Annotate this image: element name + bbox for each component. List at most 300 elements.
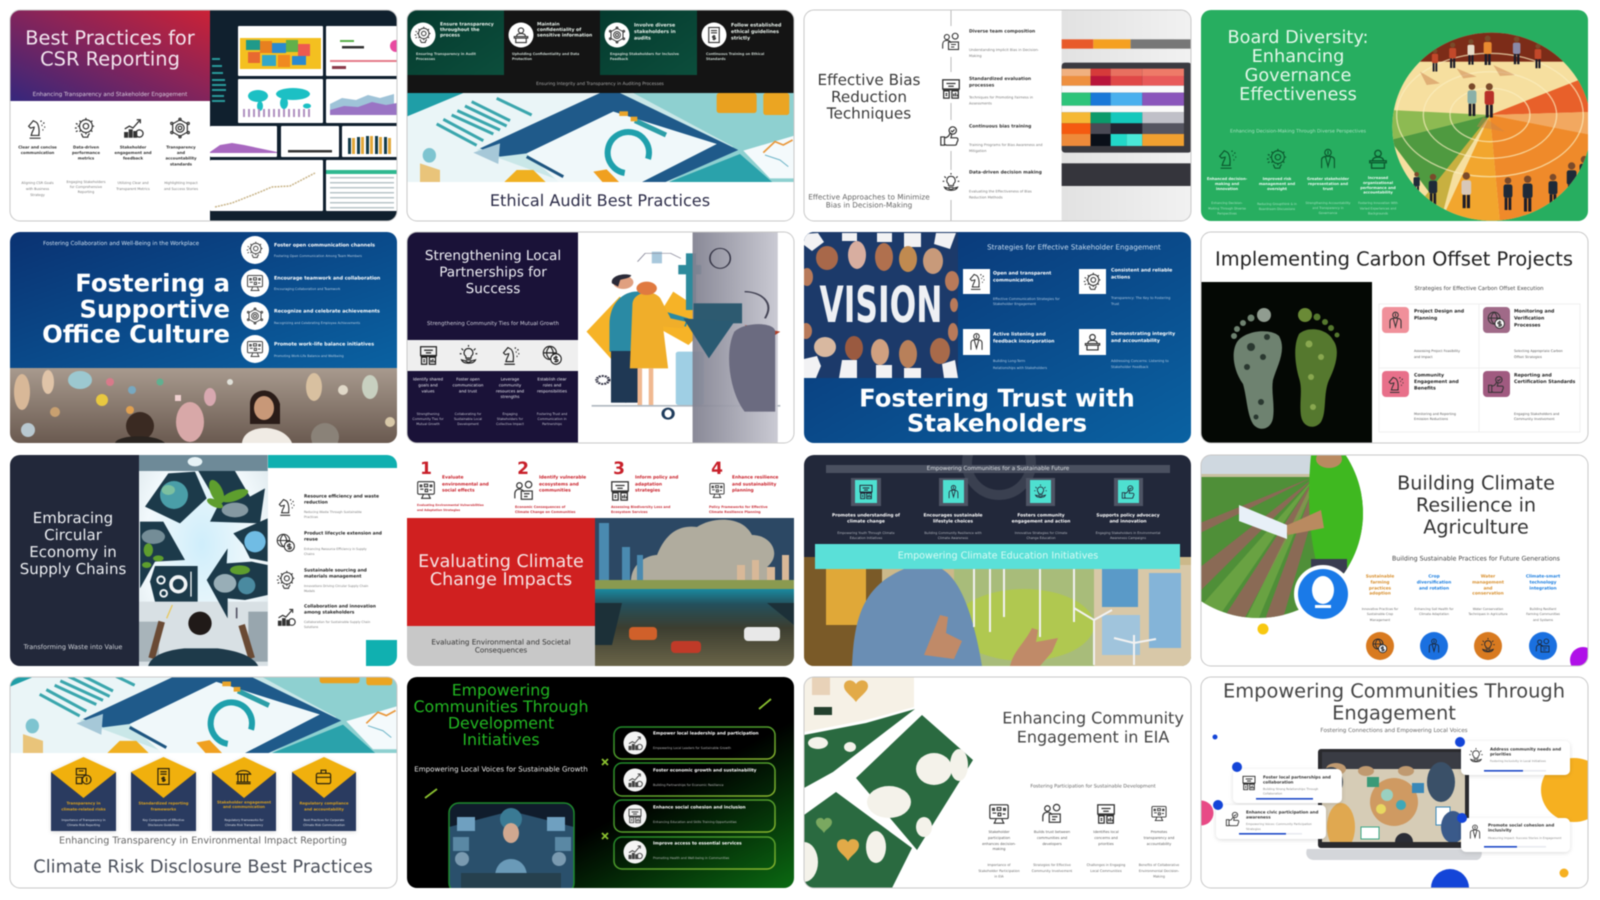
initiative captions: Education Initiatives <box>850 536 883 540</box>
strategy captions: Building Long-Term <box>993 359 1026 363</box>
practice tiles: Follow established <box>731 22 782 28</box>
benefit labels: accountability <box>1147 842 1171 846</box>
title: Governance <box>1245 66 1351 86</box>
step headings: Identify vulnerable <box>539 474 586 480</box>
labels: roles and <box>543 382 562 388</box>
vision photo <box>800 232 959 378</box>
feature captions: Transparent Metrics <box>115 187 150 191</box>
labels <box>413 376 567 399</box>
practice captions: Climate Adaptation <box>1419 612 1449 616</box>
border <box>407 232 794 443</box>
initiative captions: Empowering Youth Through Climate <box>837 531 895 535</box>
benefit captions: Backgrounds <box>1368 212 1388 216</box>
title: Development <box>448 714 554 732</box>
strategy headings: and accountability <box>1111 338 1160 344</box>
panel: Fostering a Supportive Office Culture <box>10 232 397 451</box>
practice tiles: confidentiality of <box>537 27 582 33</box>
title: Enhancing Community <box>1002 708 1184 728</box>
icons <box>277 500 295 625</box>
practice tiles: stakeholders in <box>634 29 676 35</box>
circular economy image <box>135 455 268 668</box>
step headings <box>442 474 778 494</box>
card captions: Best Practices for Corporate <box>304 818 345 822</box>
strategy headings: Verification <box>1514 316 1544 322</box>
callout headings: priorities <box>1490 752 1512 756</box>
initiative cards <box>614 727 775 869</box>
initiative captions <box>837 531 1161 540</box>
practice list: Encourage teamwork and collaboration <box>274 276 381 282</box>
title: Economy in <box>29 543 117 561</box>
callout headings: Address community needs and <box>1490 746 1561 752</box>
strategy headings <box>1414 308 1576 392</box>
panel: Implementing Carbon Offset Projects <box>1201 232 1588 443</box>
callout headings: Promote social cohesion and <box>1488 822 1554 828</box>
feature labels: communication <box>21 150 54 155</box>
title: Effectiveness <box>1239 85 1357 105</box>
futuristic meeting image <box>449 803 574 893</box>
practice tiles: Involve diverse <box>634 22 676 28</box>
technique captions: Understanding Implicit Bias in Decision- <box>969 48 1040 52</box>
practice list: Foster open communication channels <box>274 242 375 248</box>
step icons <box>418 481 724 500</box>
step headings: and sustainability <box>732 482 777 488</box>
practice headings: conservation <box>1472 590 1504 596</box>
title: Initiatives <box>462 730 540 749</box>
subtitle: Fostering Participation for Sustainable Development <box>1030 784 1156 790</box>
benefit captions: Strengthening Accountability <box>1306 201 1351 205</box>
list captions: Innovations Driving Circular Supply Chain <box>304 584 368 588</box>
title banner <box>815 544 1180 569</box>
title: Climate Risk Disclosure Best Practices <box>33 856 373 878</box>
icon tiles <box>1382 307 1510 397</box>
step numbers: 2 <box>517 459 529 479</box>
benefit labels: Increased <box>1368 176 1389 180</box>
laptop with photo <box>1306 749 1482 860</box>
card captions: Climate Risk Transparency <box>225 823 263 827</box>
feature labels: Data-driven <box>73 144 99 150</box>
strategy captions: Offset Strategies <box>1514 355 1542 359</box>
practice tiles: Ensure transparency <box>440 22 494 28</box>
icons <box>1220 149 1386 168</box>
strategy captions: Community Involvement <box>1514 417 1555 421</box>
practice tiles: ethical guidelines <box>731 29 779 35</box>
feature labels: Clear and concise <box>18 144 57 150</box>
practice list: Promoting Work-Life Balance and Wellbeing <box>274 354 344 358</box>
practice headings: and rotation <box>1419 586 1449 592</box>
benefit labels: enhances decision- <box>982 842 1017 846</box>
subtitle: Enhancing Transparency in Environmental Impact Reporting <box>59 836 347 846</box>
title <box>859 384 1135 438</box>
border <box>407 10 794 221</box>
practice headings: diversification <box>1417 580 1451 586</box>
initiative headings: and innovation <box>1109 518 1147 524</box>
benefit labels: accountability <box>1363 190 1393 194</box>
initiative headings: Fosters community <box>1017 512 1065 518</box>
step captions: Ecosystem Services <box>611 510 648 514</box>
practice tiles: strictly <box>731 36 751 42</box>
list headings: Resource efficiency and waste <box>304 494 379 500</box>
practice captions: Management <box>1370 618 1391 622</box>
title <box>1228 28 1368 105</box>
technique captions: Reduction Methods <box>969 196 1003 200</box>
title: Empowering Communities Through <box>1223 680 1565 702</box>
classroom photo <box>804 557 1191 666</box>
strategy captions: Engaging Stakeholders and <box>1514 412 1559 416</box>
initiative cards: Foster economic growth and sustainability <box>653 768 757 774</box>
icons column <box>941 33 959 190</box>
title <box>1002 708 1184 746</box>
decorative circles <box>1188 734 1600 900</box>
captions: Engaging <box>503 412 517 416</box>
labels: Foster open <box>456 376 480 382</box>
border <box>10 10 397 221</box>
step headings: adaptation <box>635 482 662 488</box>
strategy captions: Transparency: The Key to Fostering <box>1110 296 1170 300</box>
practice tiles <box>407 10 794 93</box>
list headings: Product lifecycle extension and <box>304 530 382 536</box>
panel: Effective Bias Reduction Techniques <box>804 9 1195 223</box>
strategy captions: Effective Communication Strategies for <box>993 297 1060 301</box>
panel: Strengthening Local Partnerships for Success <box>407 225 794 445</box>
strategy headings: Planning <box>1414 316 1437 322</box>
callout icons <box>1226 748 1483 839</box>
initiative cards: Enhance social cohesion and inclusion <box>653 804 746 810</box>
title <box>42 272 230 344</box>
practice list <box>241 236 381 363</box>
strategy headings: Engagement and <box>1414 379 1459 385</box>
subtitle: Strengthening Community Ties for Mutual Growth <box>427 320 559 327</box>
initiative captions: Climate Awareness <box>938 536 969 540</box>
title: Agriculture <box>1423 516 1529 538</box>
practice captions: Water Conservation <box>1473 607 1503 611</box>
initiative captions: Awareness Campaigns <box>1110 536 1146 540</box>
title <box>414 680 588 749</box>
technique headings: processes <box>969 84 995 88</box>
practice tiles: Processes <box>416 57 435 61</box>
red title block: Change Impacts <box>430 570 572 590</box>
subtitle: Effective Approaches to Minimize <box>808 192 930 202</box>
labels: communication <box>453 382 484 388</box>
benefit labels: making <box>992 847 1006 851</box>
practice icons <box>1366 632 1557 660</box>
card headings: Regulatory compliance <box>299 800 349 806</box>
map mosaic image <box>790 677 973 888</box>
title <box>818 71 921 122</box>
title: Resilience in <box>1416 494 1536 516</box>
benefit labels: organizational <box>1363 181 1393 185</box>
list captions <box>304 510 370 629</box>
initiative captions: Change Education <box>1026 536 1056 540</box>
dashboard image <box>210 10 402 221</box>
strategy captions <box>993 296 1170 370</box>
panel: Best Practices for CSR Reporting <box>10 10 402 221</box>
strategy captions <box>1414 349 1563 421</box>
practice list: Encouraging Collaboration and Teamwork <box>274 287 341 291</box>
labels: Identify shared <box>413 376 443 382</box>
practice tiles: throughout the <box>440 27 480 33</box>
initiative captions: Innovative Strategies for Climate <box>1015 531 1067 535</box>
benefit labels: concerns and <box>1094 836 1118 840</box>
title banner: Enhancing Transparency and Stakeholder Engagement <box>33 91 188 98</box>
title: Enhancing <box>1252 47 1344 67</box>
technique headings: Continuous bias training <box>969 124 1031 130</box>
icons <box>990 804 1166 823</box>
list headings: Sustainable sourcing and <box>304 568 367 574</box>
practice captions: Farming Communities <box>1526 612 1560 616</box>
title: Techniques <box>826 104 911 122</box>
callout captions <box>1246 759 1562 840</box>
benefit labels: Promotes <box>1151 830 1167 834</box>
technique captions: Mitigation <box>969 149 986 153</box>
practice tiles: Ensuring Integrity and Transparency in Auditing Processes <box>536 81 665 87</box>
strategy headings: Demonstrating integrity <box>1111 331 1175 337</box>
step captions: Climate Resilience Planning <box>709 510 761 514</box>
strategy captions: Emission Reductions <box>1414 417 1448 421</box>
technique headings: Data-driven decision making <box>969 170 1042 176</box>
card captions: Importance of Transparency in <box>61 818 106 822</box>
strategy headings: Open and transparent <box>993 270 1052 276</box>
card captions: Climate Risk Communication <box>303 823 345 827</box>
captions: Development <box>457 422 479 426</box>
strategy captions: Monitoring and Reporting <box>1414 412 1456 416</box>
icon tiles <box>851 478 1143 506</box>
feature captions: and Success Stories <box>164 187 198 191</box>
benefit captions: Making <box>1153 874 1165 878</box>
card captions <box>61 818 345 827</box>
list captions: Practices <box>304 515 318 519</box>
border <box>10 677 397 888</box>
title: Engagement in EIA <box>1017 728 1169 746</box>
callout captions: Building Strong Relationships Through <box>1263 787 1318 791</box>
initiative cards: Promoting Health and Well-being in Communities <box>653 856 730 860</box>
initiative headings: climate change <box>847 518 885 524</box>
technique headings: Diverse team composition <box>969 28 1035 34</box>
icon tiles <box>963 269 1106 355</box>
panel: Board Diversity <box>1201 10 1600 223</box>
benefit captions: Perspectives <box>1217 212 1237 216</box>
panel: Empowering Communities Through Development Initiatives <box>407 677 794 893</box>
benefit labels: trust <box>1323 187 1333 191</box>
subtitle <box>808 192 930 210</box>
title: Success <box>466 281 520 297</box>
initiative captions: Building Community Resilience with <box>924 531 982 535</box>
captions: Partnerships <box>542 422 562 426</box>
callout progress bars <box>1239 770 1546 848</box>
labels: and trust <box>459 388 478 394</box>
feature labels: Stakeholder <box>120 144 146 150</box>
captions: Collective Impact <box>496 422 525 426</box>
feature captions: with Business <box>26 187 49 191</box>
title: Empowering <box>452 680 550 700</box>
benefit captions: and Transparency in <box>1312 206 1344 210</box>
border <box>1201 232 1588 443</box>
strategy captions: Relationships with Stakeholders <box>993 366 1047 370</box>
subtitle: Building Sustainable Practices for Future Generations <box>1392 556 1560 562</box>
panel: Evaluating Climate Change Impacts <box>407 455 794 666</box>
benefit captions: Making Through Diverse <box>1208 206 1246 210</box>
practice tiles: Upholding Confidentiality and Data <box>512 52 580 56</box>
list captions: Solutions <box>304 625 319 629</box>
practice cards <box>51 757 356 831</box>
title: Circular <box>44 526 103 544</box>
title: Ethical Audit Best Practices <box>490 191 710 210</box>
vision photo: VISION <box>820 276 942 334</box>
callout cards <box>1216 741 1570 852</box>
panel: Enhancing Community Engagement in EIA <box>790 677 1191 888</box>
practice tiles: sensitive information <box>537 32 592 38</box>
benefit captions: Reducing Groupthink & in <box>1257 202 1297 206</box>
panel: Empowering Communities Through Engagement <box>1188 677 1600 900</box>
red title block: Evaluating Climate <box>418 552 584 572</box>
strategy captions: and Impact <box>1414 355 1433 359</box>
technique headings <box>969 28 1042 176</box>
strategy headings <box>993 268 1175 344</box>
practice headings: integration <box>1529 586 1557 592</box>
feature labels <box>18 144 197 166</box>
callout markers <box>1213 737 1467 823</box>
step headings: communities <box>539 488 571 494</box>
step captions: and Adaptation Strategies <box>417 508 460 512</box>
step numbers: 1 <box>420 459 432 479</box>
practice list: Recognize and celebrate achievements <box>274 308 380 314</box>
step numbers: 4 <box>711 459 723 479</box>
benefit captions: Environmental Decision- <box>1139 869 1180 873</box>
strategy captions: Addressing Concerns: Listening to <box>1111 359 1169 363</box>
technique captions: Making <box>969 54 982 58</box>
technique captions: Training Programs for Bias Awareness and <box>968 143 1042 147</box>
subtitle: Bias in Decision-Making <box>826 200 912 210</box>
list headings: reuse <box>304 538 318 542</box>
card captions: Regulatory Frameworks for <box>224 818 264 822</box>
footprints image <box>1201 282 1372 443</box>
feature captions: Strategy <box>30 193 45 197</box>
step headings: ecosystems and <box>539 482 579 488</box>
card captions: Key Components of Effective <box>143 818 185 822</box>
panel: Fostering Trust with Stakeholders <box>800 232 1191 443</box>
labels: Establish clear <box>537 376 567 382</box>
list headings: among stakeholders <box>304 610 355 616</box>
list headings: materials management <box>304 574 361 580</box>
practice captions: Building Resilient <box>1530 607 1557 611</box>
grey subtitle block: Evaluating Environmental and Societal <box>431 638 571 646</box>
practice tiles: Engaging Stakeholders for Inclusive <box>610 52 680 56</box>
list headings: reduction <box>304 500 328 506</box>
benefit labels: Greater stakeholder <box>1307 177 1349 181</box>
icon row <box>29 118 189 138</box>
callout captions: Strategies <box>1246 827 1261 831</box>
list captions: Enhancing Resource Efficiency in Supply <box>304 547 367 551</box>
strategy captions: Trust <box>1110 302 1120 306</box>
feature labels: engagement and <box>114 150 152 155</box>
feature captions: for Comprehensive <box>70 185 102 189</box>
top band: Empowering Communities for a Sustainable Future <box>927 465 1070 472</box>
initiative cards: Improve access to essential services <box>653 840 742 846</box>
callout captions: Collaboration <box>1263 792 1282 796</box>
benefit captions: Strategies for Effective <box>1033 863 1071 867</box>
card headings: Transparency in <box>66 800 101 806</box>
step headings: Inform policy and <box>635 474 678 480</box>
benefit labels: developers <box>1042 842 1062 846</box>
border <box>1201 455 1588 666</box>
initiative headings: Supports policy advocacy <box>1096 512 1160 518</box>
initiative headings: engagement and action <box>1012 518 1070 524</box>
callout headings: Foster local partnerships and <box>1263 774 1331 780</box>
benefit labels: Improved risk <box>1263 177 1292 181</box>
captions: Stakeholders for <box>497 417 524 421</box>
title <box>1397 472 1555 538</box>
benefit labels: Identifies local <box>1093 830 1119 834</box>
benefit labels: Builds trust between <box>1034 830 1070 834</box>
captions: Collaborating for <box>455 412 482 416</box>
card headings: climate-related risks <box>61 806 106 812</box>
initiative cards: Empowering Local Leaders for Sustainable Growth <box>653 746 731 750</box>
initiative cards: Empower local leadership and participation <box>653 730 759 736</box>
title: Embracing <box>33 509 113 527</box>
feature captions: Reporting <box>78 190 94 194</box>
border <box>804 677 1191 888</box>
strategy captions: Stakeholder Feedback <box>1111 365 1149 369</box>
list headings: Collaboration and innovation <box>304 604 376 610</box>
grey subtitle block <box>407 626 595 666</box>
callout headings: Enhance civic participation and <box>1246 810 1318 814</box>
practice captions: Sustainable Crop <box>1367 612 1393 616</box>
panel: Embracing Circular Economy <box>10 455 397 668</box>
labels: goals and <box>418 382 438 388</box>
flooded city image <box>595 518 794 666</box>
subtitle: Enhancing Decision-Making Through Diverse Perspectives <box>1230 128 1367 134</box>
strategy captions: Stakeholder Engagement <box>993 302 1037 306</box>
feature captions: Aligning CSR Goals <box>21 181 54 185</box>
title: Reduction <box>831 88 907 106</box>
practice tiles: Standards <box>706 57 726 61</box>
captions: Strengthening <box>417 412 439 416</box>
strategy captions: Selecting Appropriate Carbon <box>1514 349 1563 353</box>
benefit captions: Boardroom Discussions <box>1259 207 1295 211</box>
step numbers: 3 <box>613 459 625 479</box>
feature captions: Utilizing Clear and <box>117 181 149 185</box>
feature labels: and <box>177 150 185 155</box>
strategy headings: Processes <box>1514 322 1541 328</box>
feature labels: accountability <box>165 156 197 160</box>
strategy captions: Assessing Project Feasibility <box>1414 349 1460 353</box>
decorative dots <box>1258 624 1596 673</box>
benefit captions: Benefits of Collaborative <box>1139 863 1179 867</box>
top band <box>826 465 1170 473</box>
callout captions: Measuring Impact: Success Stories in Engagement <box>1488 836 1562 840</box>
initiative headings: Encourages sustainable <box>924 512 982 518</box>
labels: responsibilities <box>537 388 567 394</box>
feature captions <box>21 180 198 197</box>
practice headings: Climate-smart <box>1526 574 1560 580</box>
benefit labels: communities and <box>1037 836 1067 840</box>
benefit labels: priorities <box>1098 842 1114 846</box>
card headings <box>61 800 349 812</box>
step headings: social effects <box>442 488 475 494</box>
title banner: Empowering Climate Education Initiatives <box>898 550 1098 562</box>
list captions: Chains <box>304 552 315 556</box>
practice captions: Enhancing Soil Health for <box>1414 607 1454 611</box>
strategy headings: actions <box>1111 274 1130 280</box>
practice headings: farming <box>1371 580 1389 586</box>
subtitle: Fostering Connections and Empowering Local Voices <box>1320 727 1468 734</box>
farmer photo <box>1151 405 1371 625</box>
callout captions: Fostering Inclusivity in Local Initiatives <box>1490 759 1546 763</box>
audit illustration <box>10 663 400 754</box>
icons <box>421 345 561 364</box>
title: Communities Through <box>414 697 588 716</box>
practice list: Recognizing and Celebrating Employee Achievements <box>274 321 361 325</box>
benefit captions: Community Involvement <box>1032 869 1073 873</box>
